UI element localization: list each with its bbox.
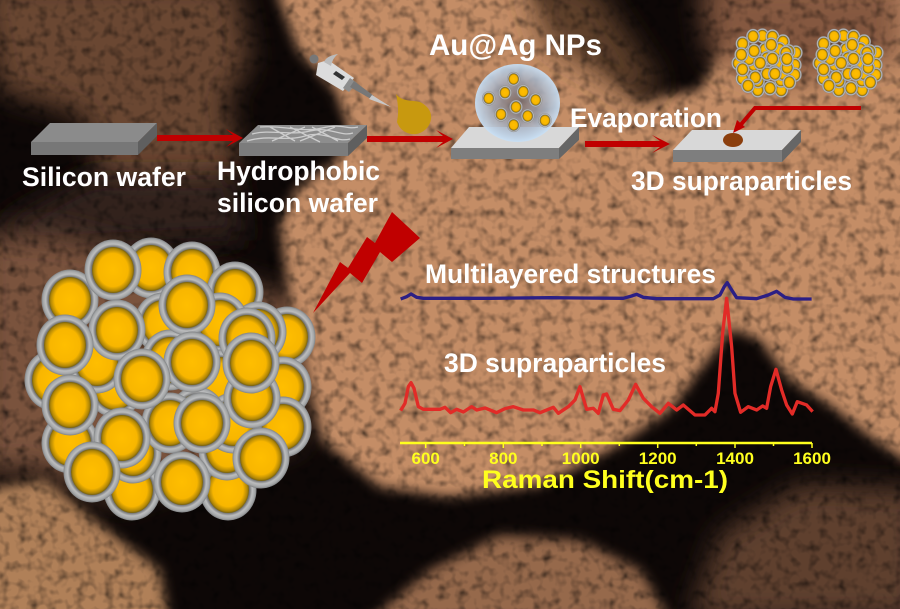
- label: hydrophobic silicon wafer: silicon wafer: [217, 188, 378, 218]
- axis title: Raman Shift(cm-1): [482, 466, 728, 494]
- wafer: with supraparticle spot: [673, 130, 801, 162]
- label: silicon wafer: Silicon wafer: [22, 162, 186, 192]
- arrow: hydrophobic to droplet: [367, 130, 453, 148]
- icon: lightning bolt: [313, 212, 420, 313]
- label: hydrophobic silicon wafer: [217, 156, 380, 218]
- series: 3D supraparticles: [401, 298, 813, 415]
- wafer: hydrophobic silicon wafer: [239, 125, 367, 156]
- wafer: silicon wafer: [31, 123, 157, 155]
- wafer: with droplet: [451, 127, 579, 159]
- x axis: 1200: [639, 449, 677, 468]
- series: multilayered structures: [401, 283, 812, 299]
- x axis: 600: [412, 449, 440, 468]
- x axis: 1600: [793, 449, 831, 468]
- icon: pipette: [310, 54, 391, 107]
- label: Au@Ag NPs: Au@Ag NPs: [429, 29, 602, 62]
- icon: mini supraparticle left: [731, 28, 803, 98]
- label: multilayered structures: Multilayered structures: [425, 259, 716, 289]
- x axis: 1000: [562, 449, 600, 468]
- label: evaporation: Evaporation: [570, 103, 722, 133]
- icon: gold droplet: [396, 94, 431, 134]
- label: 3D supraparticles top: 3D supraparticles: [631, 166, 852, 196]
- x axis: [400, 443, 831, 494]
- icon: droplet of Au@Ag nanoparticles: [475, 64, 560, 142]
- label: 3D supraparticles spectrum: 3D supraparticles: [444, 348, 666, 378]
- x axis: 1400: [716, 449, 754, 468]
- supraparticle cluster: [24, 238, 316, 520]
- arrow: silicon to hydrophobic: [157, 129, 243, 147]
- x axis: 800: [489, 449, 517, 468]
- icon: mini supraparticle right: [812, 28, 884, 98]
- label: hydrophobic silicon wafer: Hydrophobic: [217, 156, 380, 186]
- chart: Raman spectra: [400, 283, 831, 494]
- arrow: leader to spot: [733, 108, 861, 133]
- arrow: evaporation: [585, 135, 670, 153]
